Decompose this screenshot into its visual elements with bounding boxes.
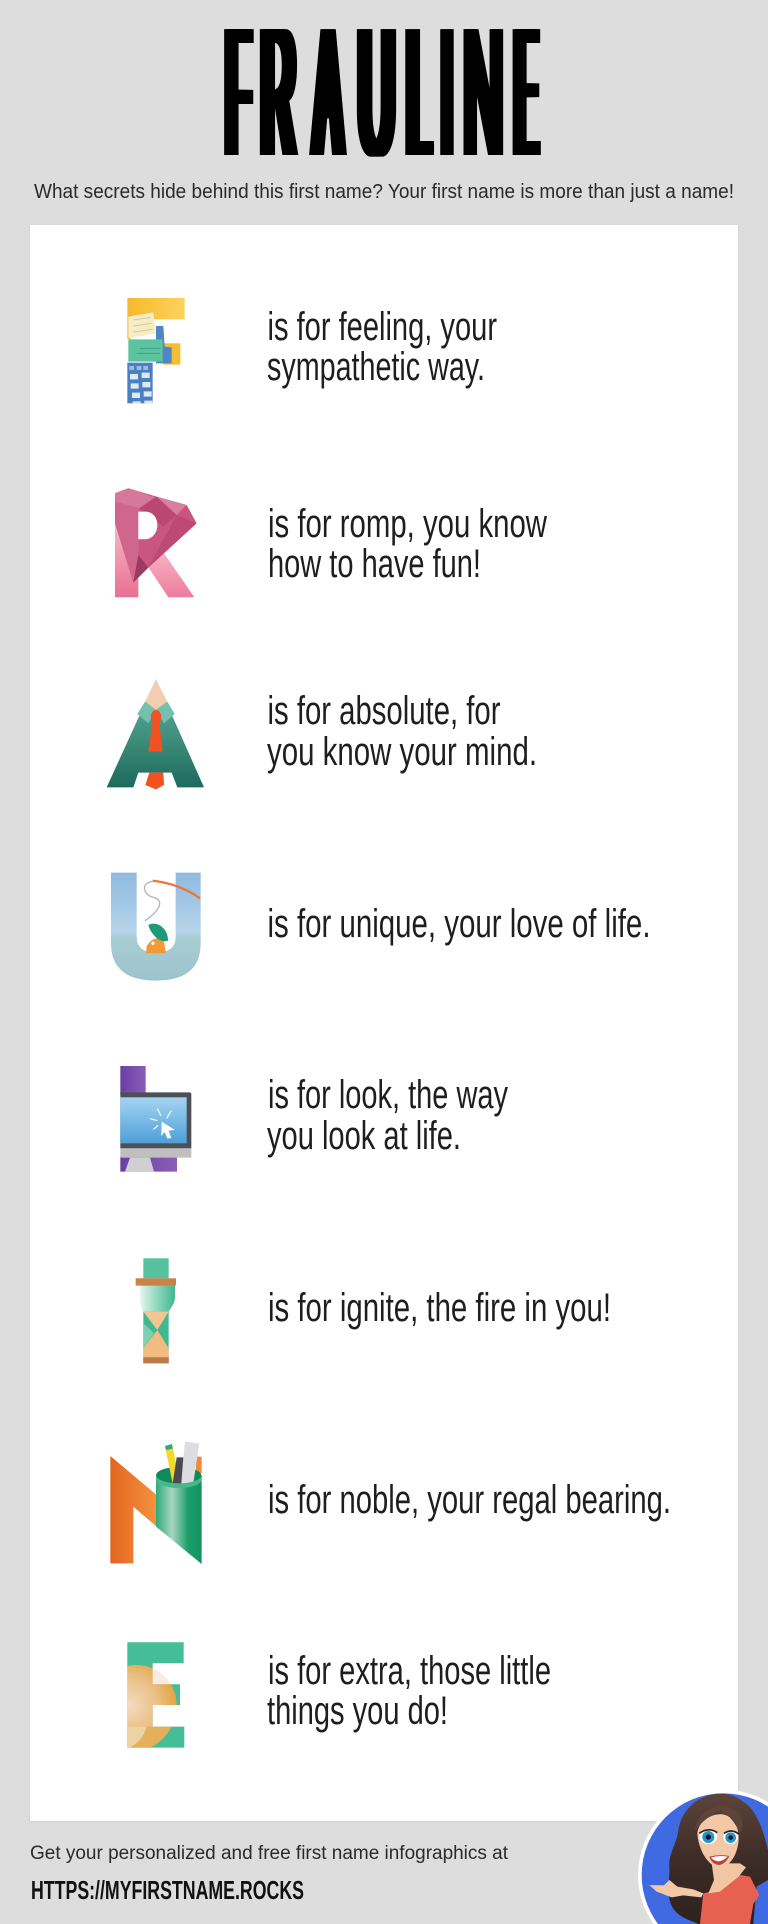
text: L — [267, 1073, 508, 1158]
icon: letter I — [136, 1258, 176, 1363]
text: E: things you do! — [267, 1689, 448, 1733]
subtitle: What secrets hide behind this first name? Your first name is more than just a name! — [34, 180, 734, 203]
text: R — [268, 502, 547, 586]
text: L: is for look, the way — [268, 1073, 508, 1117]
panel: white card — [30, 225, 738, 1821]
footer text: Get your personalized and free first name infographics at — [30, 1843, 509, 1864]
avatar: woman in blue circle — [638, 1790, 768, 1924]
text: A — [267, 689, 537, 774]
text: L: you look at life. — [267, 1114, 461, 1158]
icon: letter F — [127, 298, 185, 403]
text: R: is for romp, you know — [268, 502, 547, 546]
text: E: is for extra, those little — [268, 1649, 551, 1693]
text: I: is for ignite, the fire in you! — [268, 1286, 611, 1330]
text: A: you know your mind. — [267, 730, 537, 774]
text: F: sympathetic way. — [267, 345, 485, 389]
title — [221, 0, 541, 194]
text: E — [267, 1649, 551, 1733]
text: A: is for absolute, for — [268, 689, 500, 733]
icon: letter E — [127, 1642, 184, 1748]
icon: letter R — [115, 488, 197, 597]
text: R: how to have fun! — [268, 542, 481, 586]
icon: letter L — [120, 1066, 191, 1172]
text: F — [267, 305, 497, 389]
footer url: HTTPS://MYFIRSTNAME.ROCKS — [31, 1875, 304, 1905]
icon: letter U — [111, 873, 201, 981]
text: F: is for feeling, your — [268, 305, 497, 349]
icon: letter A — [107, 679, 204, 789]
icon: letter N — [110, 1442, 202, 1564]
